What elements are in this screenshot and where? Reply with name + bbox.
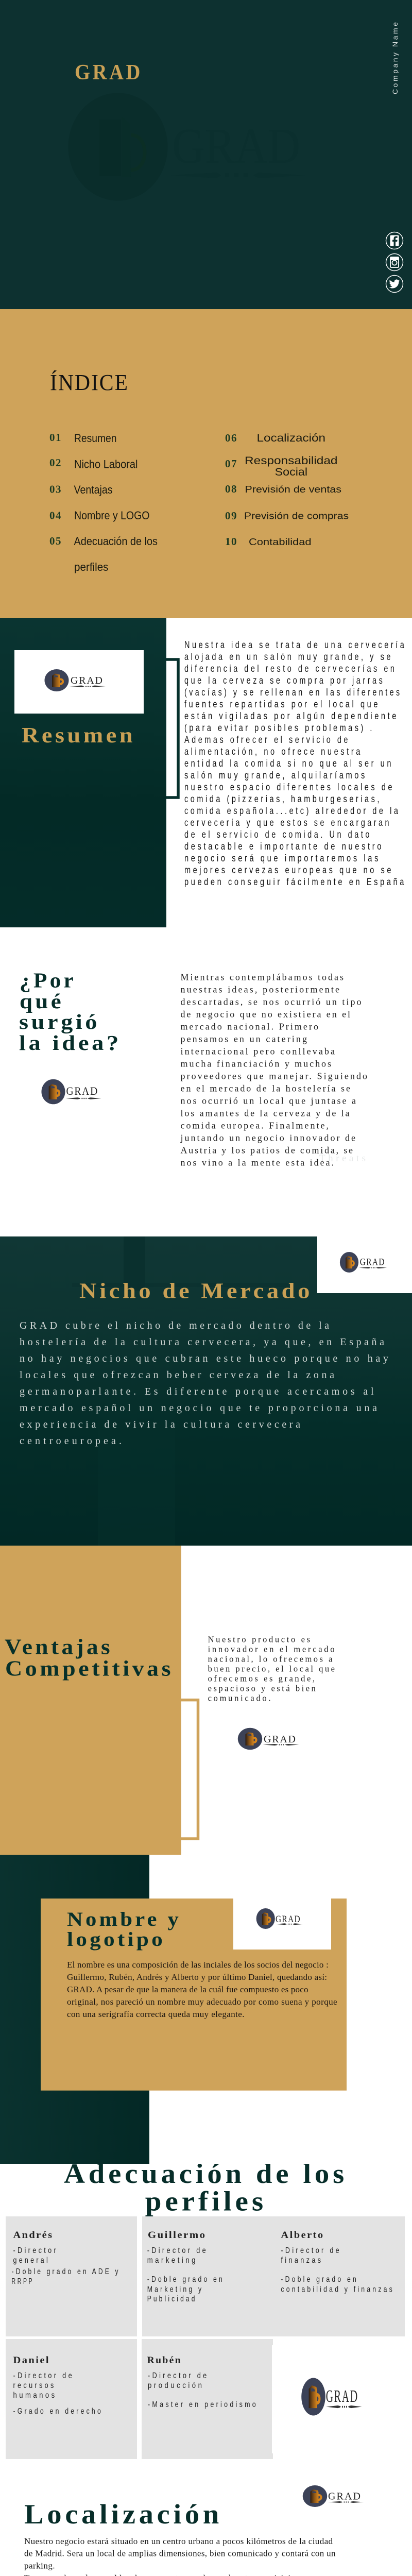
index left column: Nicho Laboral [74,457,138,471]
icon: instagram [386,253,403,271]
card: Andrés: RRPP [11,2277,34,2286]
text block: origen: pensamos en un catering [180,1034,307,1044]
card: Andrés [6,2216,137,2336]
heading: Nicho de Mercado: Nicho de Mercado [79,1279,313,1303]
heading: Adecuación de los perfiles: perfiles [145,2186,267,2217]
text block: origen: nos ocurrió un local que juntase a [180,1096,356,1106]
card: Andrés: -Director [13,2246,58,2255]
panel: resumen [0,618,406,927]
logo: GRAD [326,2387,357,2406]
card: Guillermo y Alberto: -Doble grado en [281,2275,358,2284]
text block: origen: nuestras ideas, posteriormente [180,985,339,995]
heading: ¿Por qué surgió la idea? [19,969,122,1055]
panel: cover [0,0,412,309]
text block: nicho: locales que ofrezcan beber cerveza de la zona [20,1369,334,1381]
text block: nicho: GRAD cubre el nicho de mercado dentro de la [20,1320,329,1331]
index left column: Ventajas [74,483,112,496]
index left column [49,431,158,573]
watermark logo [68,93,305,201]
text block: nombre: Guillermo, Rubén, Andrés y Alberto y por último Daniel, quedando así: [67,1972,327,1982]
panel: por qué surgió la idea [19,969,367,1168]
heading: ¿Por qué surgió la idea?: ¿Por [20,969,76,992]
text block: origen: de negocio que no existiera en el [180,1009,350,1020]
index right column: 07 [225,457,238,470]
index right column: Contabilidad [249,537,312,547]
card: Rubén: producción [148,2381,204,2390]
panel: nicho de mercado [0,1236,412,1546]
heading: ¿Por qué surgió la idea?: la idea? [19,1031,122,1055]
heading: ÍNDICE: ÍNDICE [50,370,129,395]
text block: origen: nos vino a la mente esta idea. [180,1158,334,1168]
text block: nombre: original, nos pareció un nombre muy adecuado por como suena y porque [67,1997,337,2007]
heading: Nombre y logotipo: logotipo [67,1928,165,1951]
text block: ventajas: buen precio, el local que [208,1664,335,1673]
text block: origen: mercado nacional. Primero [180,1022,318,1032]
watermark logo: GRAD [172,118,300,174]
card: Rubén: -Director de [148,2371,209,2380]
vertical label: Company Name: Company Name [391,22,399,94]
faint label: Threats: Threats [319,1153,366,1164]
text block: ventajas: nacional, lo ofrecemos a [208,1654,333,1664]
text block: origen: juntando un negocio innovador de [180,1133,355,1143]
text block: origen: internacional pero conllevaba [180,1046,335,1057]
panel: localización [24,2485,364,2576]
text block: localización: de Madrid. Sera un local de amplias dimensiones, bien comunicado y contará con un [24,2549,336,2558]
card: Guillermo y Alberto: -Doble grado en [147,2275,225,2284]
text block: ventajas: comunicado. [208,1693,271,1703]
index left column: Adecuación de los [74,535,158,548]
title: GRAD: GRAD [75,61,143,84]
card: Guillermo y Alberto: marketing [147,2256,198,2265]
heading: ¿Por qué surgió la idea?: surgió [19,1010,100,1033]
card: Rubén: Rubén [147,2355,182,2366]
index left column: perfiles [74,561,108,573]
text block: origen: mucha financiación y muchos [180,1059,331,1069]
text block: nicho: germanoparlante. Es diferente porque acercamos al [20,1386,374,1397]
text block: origen: en el mercado de la hostelería se [180,1083,350,1094]
index right column: 09 [225,510,238,522]
text block: ventajas: espacioso y está bien [208,1684,316,1693]
index left column: 02 [49,456,62,469]
card: Daniel: recursos [13,2381,56,2390]
logo box: GRAD [71,675,102,686]
text block: origen: los amantes de la cerveza y de la [180,1108,349,1118]
heading: Ventajas Competitivas: Ventajas [5,1635,113,1659]
text block: nicho: hostelería de la cultura cervecera, ya que, en España [20,1336,384,1348]
index right column: 10 [225,535,238,548]
text block: ventajas: ofrecemos es grande, [208,1673,315,1684]
card: Guillermo y Alberto: Marketing y [147,2285,203,2294]
heading: Localización: Localización [24,2499,222,2530]
card: Daniel: humanos [13,2391,57,2400]
text block: localización [24,2536,336,2576]
card: Daniel [6,2339,137,2459]
text block: resumen [184,640,406,888]
logo: GRAD [264,1734,296,1745]
card: Andrés: general [13,2256,50,2265]
card: Andrés: Andrés [13,2230,54,2241]
text block: nombre: GRAD. A pesar de que la manera de la cuál fue compuesto es poco [67,1985,308,1994]
text block: nombre [67,1960,337,2019]
card: Daniel: -Grado en derecho [13,2407,103,2416]
card: Guillermo y Alberto: -Director de [281,2246,341,2255]
logo box [233,1899,331,1950]
text block: resumen: Ademas ofrecer el servicio de [184,735,350,745]
logo [238,1728,299,1750]
logo [41,1079,101,1104]
text block: nicho: no hay negocios que cubran este hueco porque no hay [20,1353,388,1364]
logo box: GRAD [276,1914,300,1924]
text block: nicho: centroeuropea. [20,1435,122,1447]
index left column: Resumen [74,432,116,445]
card: Guillermo y Alberto [142,2216,405,2336]
text block: nicho: mercado español un negocio que te proporciona una [20,1402,377,1414]
heading: ¿Por qué surgió la idea?: qué [20,989,64,1013]
index left column: Nombre y LOGO [74,509,149,522]
icon: facebook [386,232,403,249]
index right column: Social [275,466,307,478]
card: Andrés: -Doble grado en ADE y [11,2267,121,2276]
card: Rubén [142,2339,273,2459]
logo box [317,1236,412,1293]
index right column: 06 [225,432,238,444]
text block: ventajas: Nuestro producto es [208,1634,310,1645]
logo [301,2378,362,2416]
index right column: Localización [256,432,325,444]
text block: origen: descartadas, se nos ocurrió un tipo [180,997,362,1007]
card: Daniel: Daniel [13,2355,50,2366]
bracket [181,1700,198,1839]
card: Guillermo y Alberto: Publicidad [147,2295,197,2303]
index right column: 08 [225,483,238,495]
index left column: 01 [49,431,62,444]
text block: origen [180,972,367,1168]
index right column [225,432,349,548]
card: Rubén: -Master en periodismo [148,2400,258,2409]
panel: index [0,309,412,618]
text block: nicho: experiencia de vivir la cultura cervecera [20,1419,300,1430]
text block: nombre: con una serigrafía correcta queda muy elegante. [67,2009,244,2019]
heading: Adecuación de los perfiles [64,2158,348,2217]
panel: nombre y logotipo [0,1855,347,2164]
heading: Ventajas Competitivas [5,1635,174,1681]
logo [303,2485,364,2507]
index right column: Responsabilidad [245,455,338,467]
gold card [41,1899,347,2091]
text block: ventajas [208,1634,335,1703]
index right column: Previsión de ventas [245,484,341,495]
card: Daniel: -Director de [13,2371,74,2380]
text block: origen: comida europea. Finalmente, [180,1121,329,1131]
text block: localización: Nuestro negocio estará situado en un centro urbano a pocos kilómetros de la ciudad [24,2536,333,2546]
text block: resumen: alimentación, no ofrece nuestra [184,747,363,757]
logo box [14,650,144,714]
text block: ventajas: innovador en el mercado [208,1645,335,1654]
index left column: 05 [49,535,62,547]
heading: Ventajas Competitivas: Competitivas [5,1657,174,1681]
index left column: 04 [49,510,62,522]
card: Guillermo y Alberto: -Director de [147,2246,208,2255]
text block: origen: Austria y los patios de comida, se [180,1145,353,1156]
logo: GRAD [328,2491,360,2502]
text block: origen: proveedores que manejar. Siguiendo [180,1071,367,1081]
logo box: GRAD [360,1257,385,1267]
index left column: 03 [49,483,62,496]
bracket [166,659,178,798]
heading: Nombre y logotipo [67,1908,181,1951]
text block: localización: parking. [24,2561,55,2571]
panel: ventajas competitivas [0,1546,335,1855]
panel: adecuación de los perfiles [6,2164,405,2459]
card: Guillermo y Alberto: finanzas [281,2256,323,2265]
index right column: Previsión de compras [244,511,349,521]
text block: nombre: El nombre es una composición de las inciales de los socios del negocio : [67,1960,329,1970]
icon: twitter [386,275,403,293]
heading: Nombre y logotipo: Nombre y [67,1908,181,1930]
text block: nicho [20,1320,388,1447]
heading: Resumen: Resumen [22,724,135,748]
text block: origen: Mientras contemplábamos todas [180,972,344,982]
card: Guillermo y Alberto: Alberto [281,2230,324,2241]
card: Guillermo y Alberto: Guillermo [148,2230,206,2241]
logo: GRAD [66,1084,97,1098]
